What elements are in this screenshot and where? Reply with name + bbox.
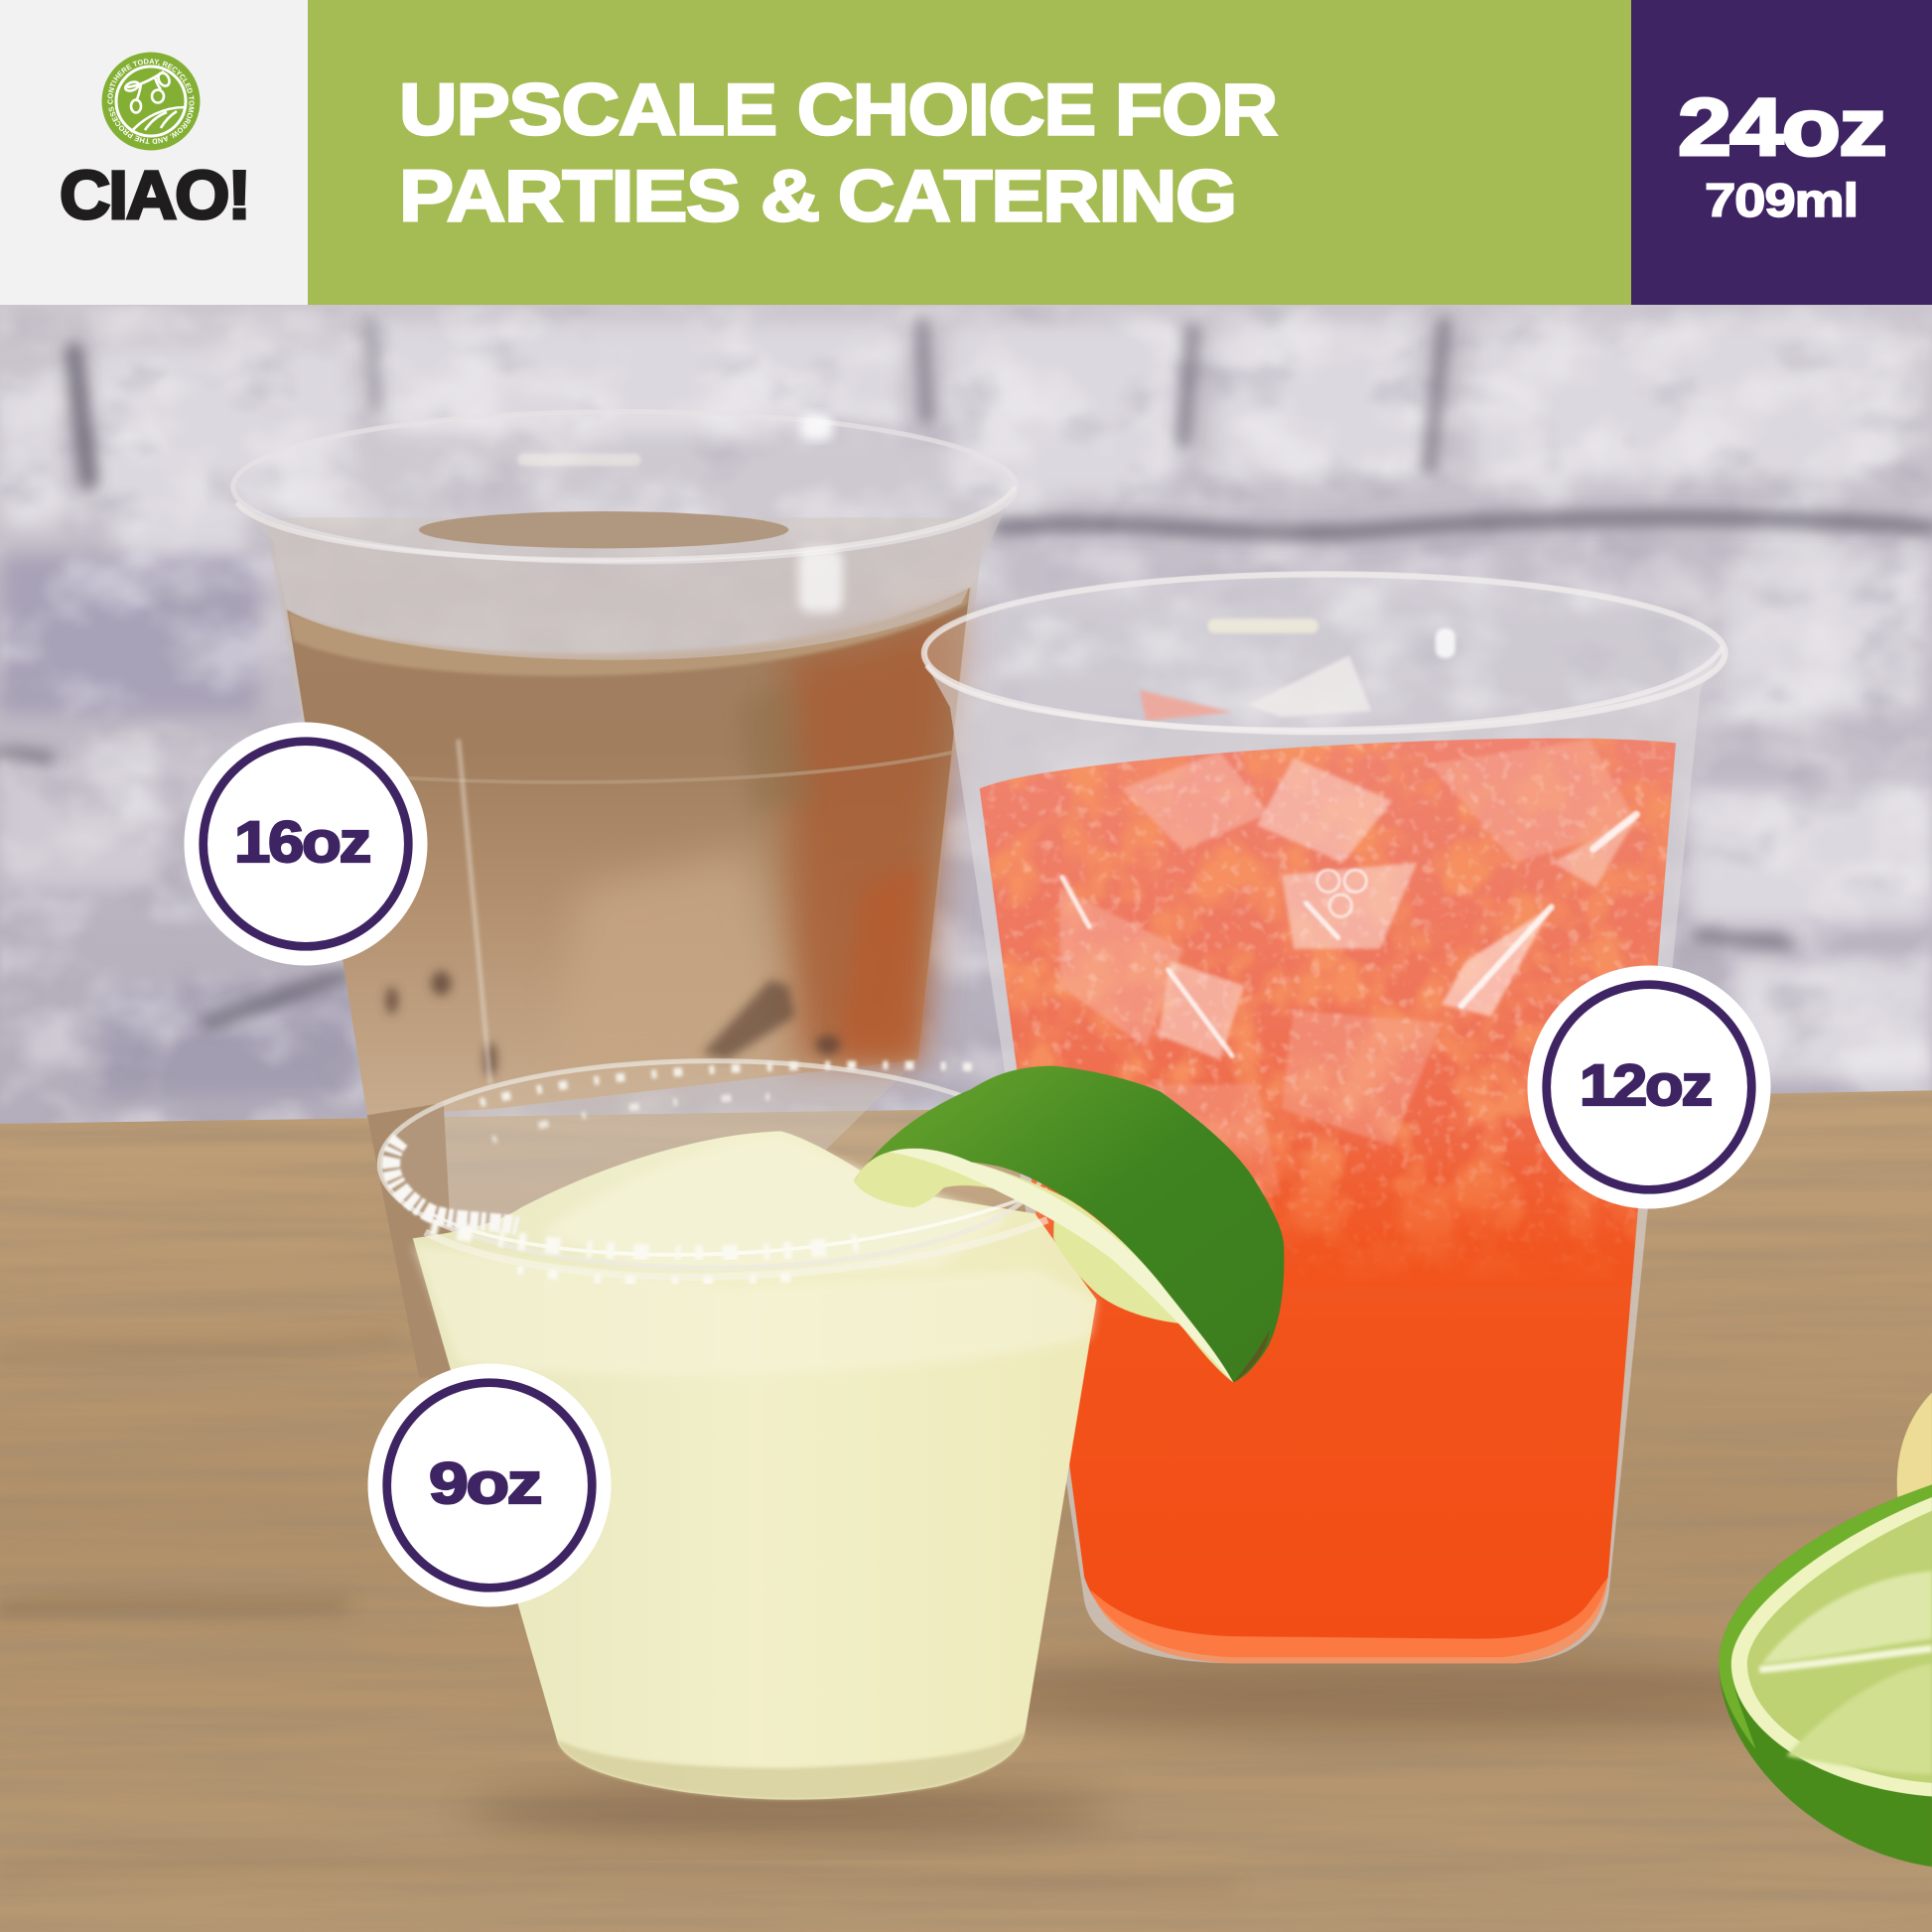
title: CHOICE — [797, 69, 1095, 151]
lime wedge on the cup rim — [854, 1066, 1284, 1383]
size panel — [1631, 0, 1932, 305]
badge: 16oz: 16oz — [234, 810, 369, 875]
title: & — [760, 157, 819, 236]
badge: 12oz: 12oz — [1580, 1053, 1711, 1118]
9oz cup with frozen margarita — [377, 1061, 1097, 1800]
icon: recycled-leaf round emblem — [101, 52, 201, 151]
brick wall background — [0, 296, 1932, 1134]
title panel — [308, 0, 1631, 305]
header bar — [0, 0, 1932, 305]
badge: 9oz — [367, 1364, 612, 1606]
wooden table — [0, 1084, 1932, 1932]
size panel: 24oz — [1678, 82, 1885, 173]
badge: 9oz: 9oz — [429, 1451, 540, 1516]
title: FOR — [1115, 69, 1277, 151]
lime half and lemon at right edge — [1719, 1392, 1932, 1866]
badge: 12oz — [1527, 965, 1771, 1209]
title: PARTIES — [399, 157, 740, 236]
16oz cup with iced coffee — [233, 412, 1017, 1378]
title: CATERING — [838, 157, 1236, 236]
title: UPSCALE — [399, 69, 776, 151]
logo panel — [0, 0, 308, 305]
badge: 16oz — [185, 723, 427, 965]
brand name: CIAO! — [60, 157, 249, 233]
title — [399, 69, 1277, 236]
size panel: 709ml — [1705, 174, 1858, 226]
12oz cup with red soda and ice — [924, 572, 1725, 1663]
